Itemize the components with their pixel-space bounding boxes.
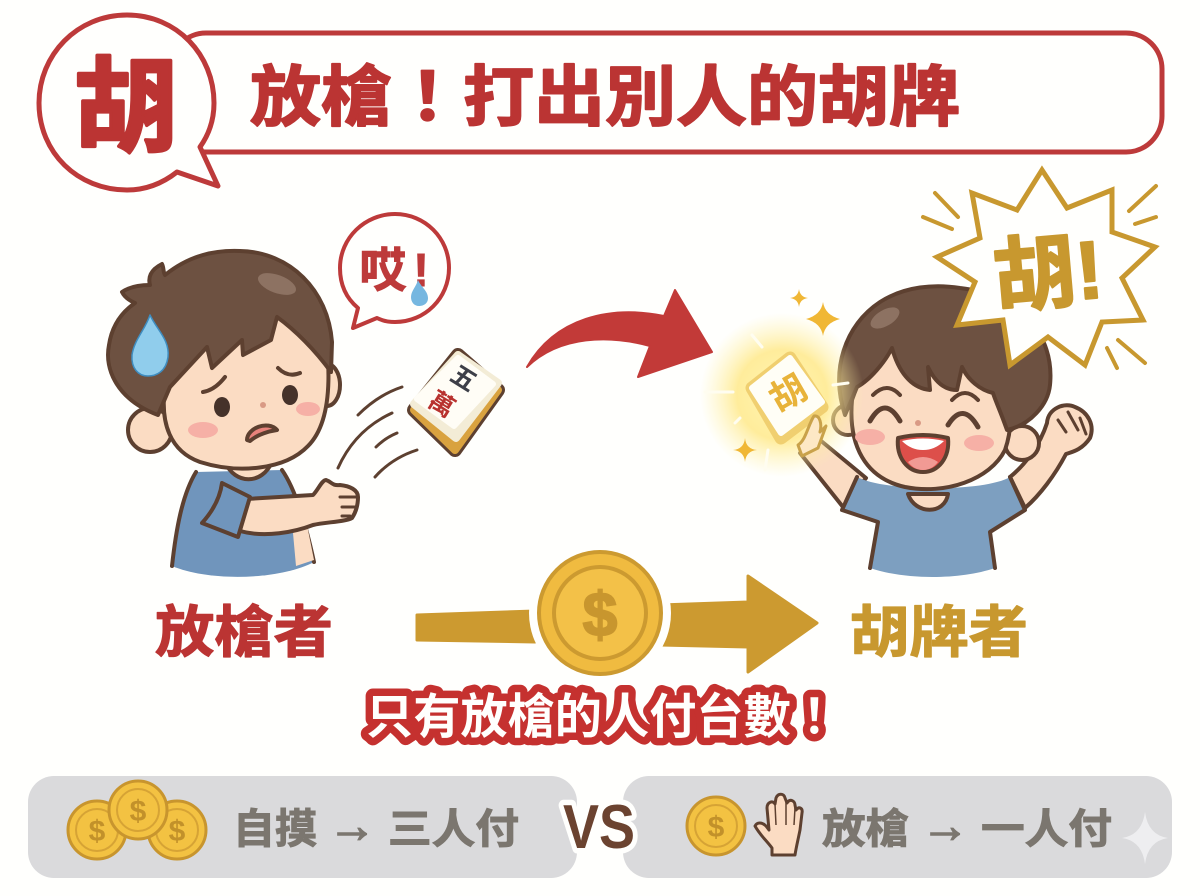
face [851, 320, 1010, 489]
nose [260, 402, 266, 408]
teeth [902, 438, 944, 450]
hair shine [255, 269, 299, 299]
coin body [539, 552, 661, 674]
burst text: 胡! [990, 224, 1107, 325]
panel background [623, 776, 1172, 878]
shirt outline [842, 477, 1025, 568]
exclamation mark: ! [413, 244, 429, 296]
neck [908, 494, 948, 510]
neck [225, 462, 272, 479]
gold base fill [414, 355, 498, 450]
coin halo [529, 542, 671, 684]
motion lines [338, 387, 417, 477]
coin inner ring [554, 567, 646, 659]
hair [839, 286, 1050, 430]
coin top: $ [130, 795, 147, 828]
bubble text: 哎 [360, 244, 406, 297]
right ear [314, 364, 340, 406]
nose [915, 420, 921, 426]
callout: only discarder pays: 只有放槍的人付台數！ [366, 691, 838, 744]
mouth [247, 425, 277, 441]
small drop [411, 280, 428, 306]
blush [855, 429, 994, 451]
speech bubble: exclamation [340, 214, 449, 328]
title text: 放槍！打出別人的胡牌 [250, 60, 960, 134]
right ear [1005, 426, 1039, 460]
arrow tail [417, 611, 535, 642]
sparkle small [790, 289, 808, 307]
label: discarder: 放槍者 [155, 601, 333, 664]
mahjong tile: five wan [414, 355, 498, 450]
finger lines [775, 802, 795, 825]
icon: coin [687, 797, 745, 855]
burst rays [923, 186, 1156, 368]
sparkle lower [733, 438, 757, 462]
character: winner boy [800, 286, 1092, 577]
title banner [39, 15, 1162, 190]
hand shape [755, 794, 802, 855]
gold payment arrow [417, 576, 817, 672]
sweat drop [132, 315, 168, 376]
open mouth [898, 435, 948, 472]
tile white face [417, 358, 493, 426]
coin right: $ [169, 815, 186, 848]
title pill outline [170, 33, 1162, 152]
icon: coin: $ [708, 811, 725, 844]
thumb and fingers [798, 416, 826, 456]
tile characters: 五 [445, 360, 481, 397]
arm and hand [240, 480, 358, 534]
character: discarder boy [108, 251, 417, 577]
title badge bubble [39, 15, 218, 190]
decorative sparkle [1122, 812, 1168, 864]
panel text left result: 三人付 [388, 806, 519, 852]
finger lines [340, 497, 356, 516]
coin left: $ [89, 815, 106, 848]
shirt fill [172, 470, 314, 577]
panel text right: 放槍 [822, 806, 909, 852]
other forearm [293, 525, 314, 566]
label: winner: 胡牌者 [850, 601, 1028, 664]
glow rays [705, 335, 848, 470]
hair [108, 251, 332, 415]
hair shine [867, 303, 903, 333]
burst shape [937, 170, 1155, 365]
sparkle large [806, 302, 840, 336]
tile cream body [414, 355, 498, 438]
eyebrows [873, 388, 978, 400]
glowing winning tile [700, 289, 864, 477]
tile [752, 358, 822, 438]
tongue [908, 457, 938, 470]
raised fist arm [1010, 405, 1092, 508]
arrow glyph left: → [328, 800, 376, 853]
shirt fill [842, 477, 1025, 577]
smiling eyes [870, 408, 978, 427]
arrow: tile passes to winner [527, 290, 712, 377]
tile character: 胡 [762, 367, 814, 420]
left ear [128, 408, 172, 452]
shirt outline [172, 470, 314, 566]
title badge character: 胡 [74, 50, 178, 165]
panel: discard win [623, 776, 1172, 878]
large gold coin [529, 542, 671, 684]
bubble shape [340, 214, 449, 328]
eyebrows [203, 368, 300, 392]
face [164, 300, 328, 469]
panel: self draw [28, 776, 577, 878]
tile outline and gold base [414, 355, 498, 450]
panel background [28, 776, 577, 878]
blush [188, 402, 320, 438]
left ear [833, 405, 863, 435]
VS badge: VS [563, 793, 635, 862]
tile inner face [752, 358, 822, 433]
arrow glyph right: → [921, 800, 969, 853]
icon: raised hand [755, 794, 802, 855]
panel text left: 自摸 [233, 806, 317, 852]
mahjong tile: five wan: 萬 [423, 386, 459, 423]
arrow head and shaft [660, 576, 817, 672]
sleeve [202, 483, 250, 537]
fist fingers [1058, 412, 1086, 434]
holding arm [800, 440, 866, 507]
icon: three coins [68, 781, 206, 859]
panel text right result: 一人付 [981, 806, 1112, 852]
eyes [214, 385, 298, 417]
starburst callout [923, 170, 1156, 368]
dollar sign: $ [583, 581, 617, 650]
glow [700, 313, 864, 477]
